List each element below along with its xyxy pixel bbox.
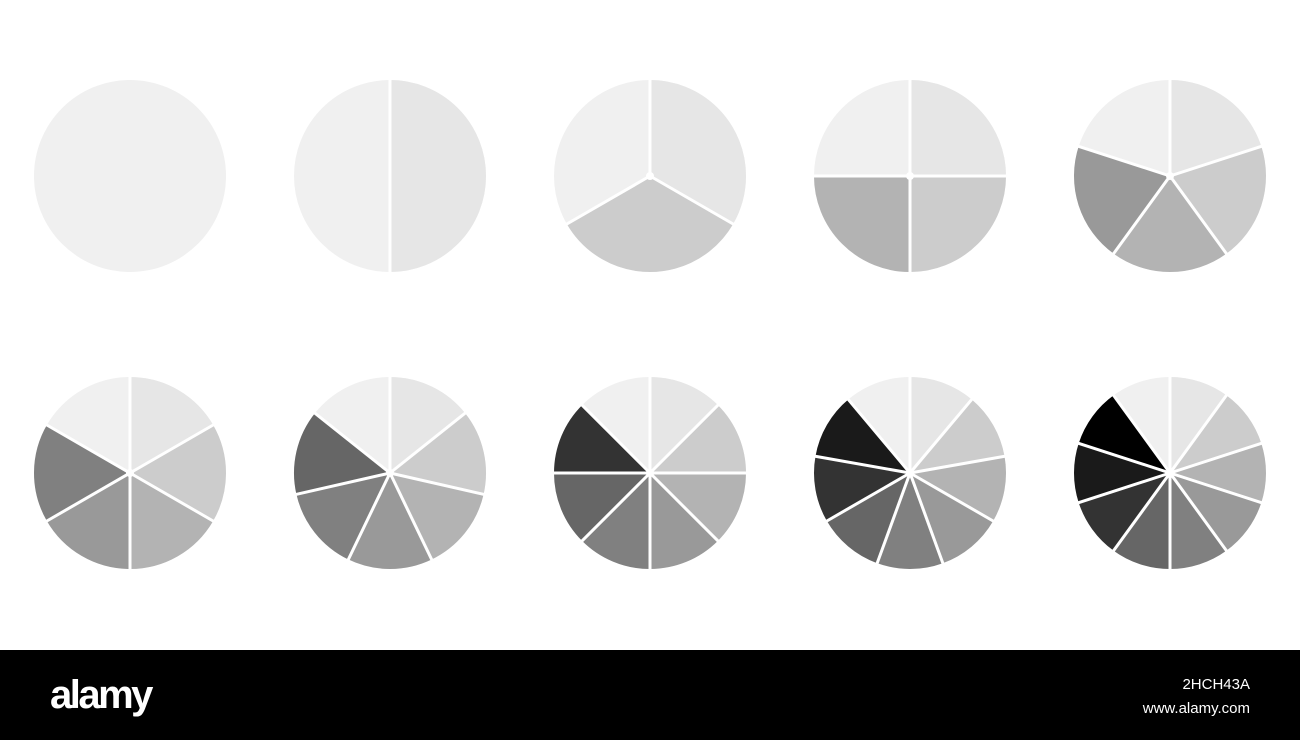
pie 1: whole <box>34 80 226 272</box>
pie 3: thirds <box>566 79 734 242</box>
pie 4: quarters <box>813 79 1007 273</box>
footer bar <box>0 650 1300 740</box>
pie 7: sevenths <box>295 376 485 560</box>
logo: alamy: alamy <box>50 673 154 717</box>
pie 10: tenths <box>1078 376 1262 570</box>
pie 8: eighths <box>553 376 747 570</box>
pie 2: halves <box>342 79 438 273</box>
pie 6: sixths <box>46 376 214 570</box>
website: www.alamy.com <box>1142 700 1250 717</box>
pie 9: ninths <box>814 376 1006 564</box>
image id: 2HCH43A <box>1182 676 1250 693</box>
pie 5: fifths <box>1078 79 1262 254</box>
